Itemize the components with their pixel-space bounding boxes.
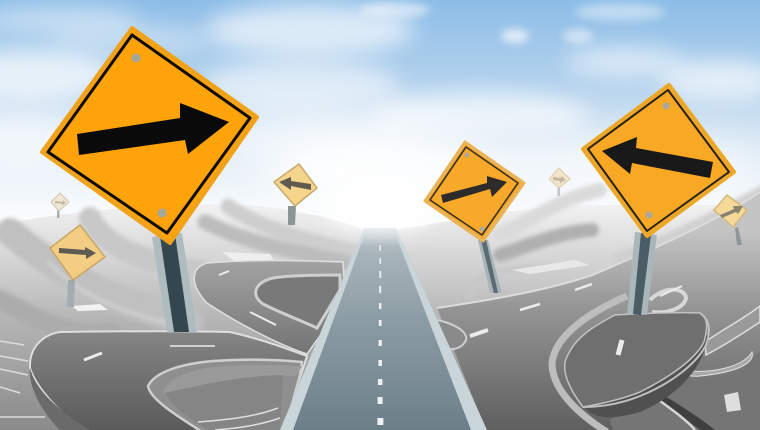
pole (478, 240, 502, 293)
far roads right (470, 190, 760, 296)
pole (152, 233, 197, 332)
medium sign centre right (425, 142, 524, 293)
right curl rim (552, 296, 627, 430)
big right road (437, 192, 760, 430)
small sign centre left (274, 164, 317, 225)
clouds (0, 2, 760, 210)
horizon glow (325, 183, 435, 231)
small sign far right (714, 195, 747, 245)
left lower ground lines (0, 341, 45, 417)
large sign right (583, 85, 734, 315)
bright gaps between left roads (72, 304, 108, 311)
straight central road (280, 228, 487, 430)
icon: left arrow (602, 137, 713, 178)
front left road (30, 331, 307, 430)
right disc rim (583, 313, 709, 407)
lane dashes (84, 271, 682, 360)
small sign left (50, 225, 105, 307)
mid-left curve road (194, 261, 345, 354)
centre dashes (377, 245, 383, 425)
right ring detail (650, 290, 686, 312)
road edge lines (280, 228, 367, 430)
right disc (582, 335, 708, 417)
small sign far left (51, 193, 69, 218)
icon: right arrow (77, 103, 229, 155)
plate (583, 85, 734, 236)
tangled road background (0, 190, 760, 430)
plate (42, 28, 257, 243)
icon: arrow (441, 176, 507, 203)
plate (425, 142, 524, 241)
bright gap right (512, 260, 590, 274)
front left inner curl (148, 360, 302, 430)
pole (627, 232, 657, 315)
upper-right road band (705, 306, 760, 355)
ground base (0, 204, 760, 430)
lower right road with ring (610, 352, 760, 430)
curve inner curl (256, 275, 340, 328)
far roads left (0, 206, 360, 334)
large sign left (42, 28, 257, 332)
small sign behind right (549, 168, 570, 196)
sky background (0, 0, 760, 260)
